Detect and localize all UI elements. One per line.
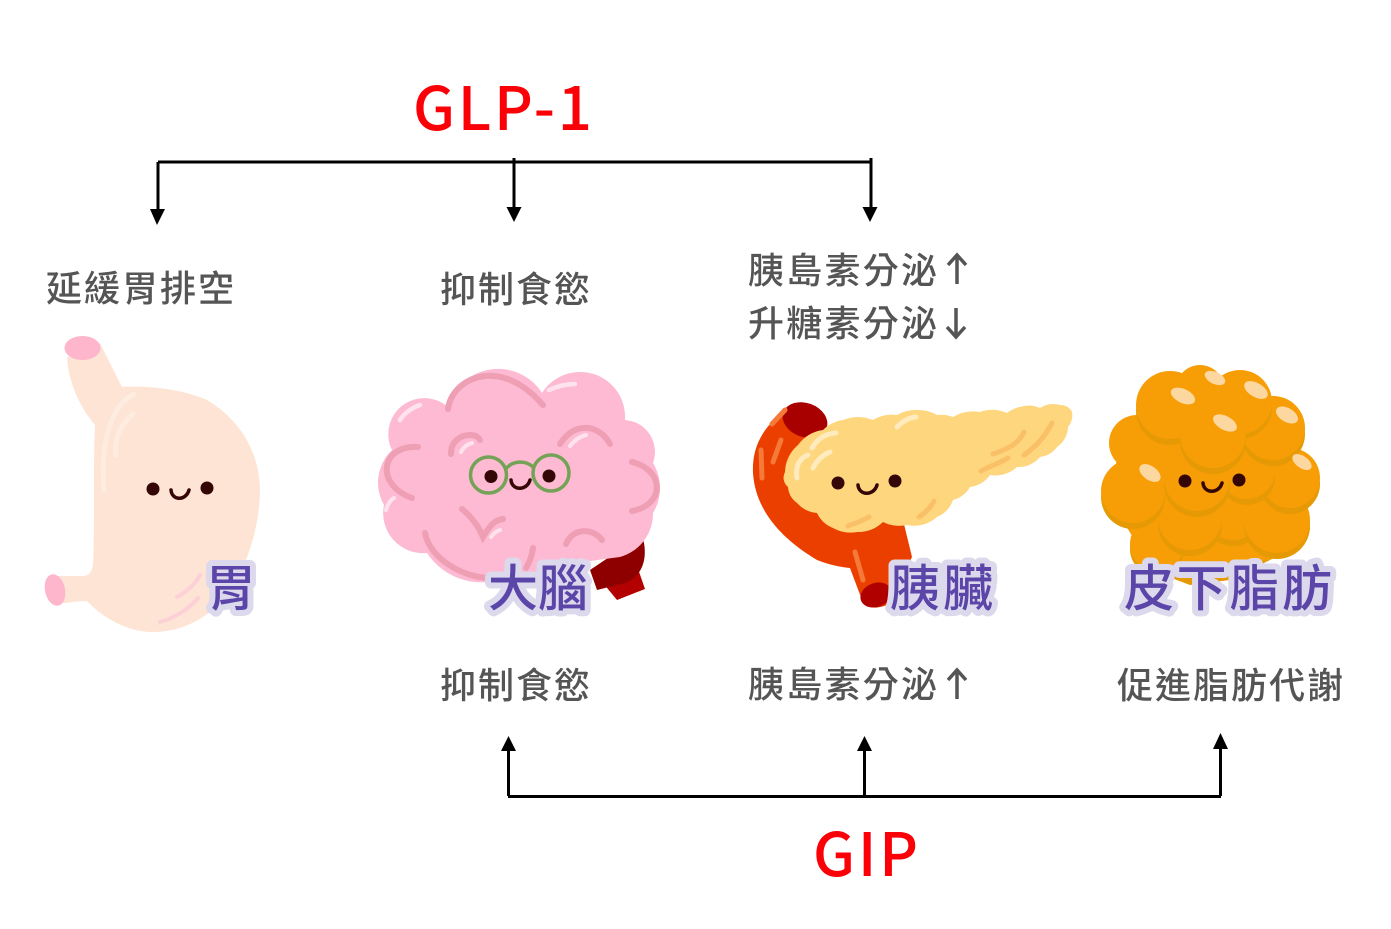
brain illustration bbox=[378, 369, 660, 600]
pancreas illustration bbox=[753, 396, 1072, 612]
stomach illustration bbox=[42, 336, 260, 632]
fat illustration bbox=[1101, 365, 1320, 585]
text: appetite suppression bottom: 抑制食慾 bbox=[440, 665, 590, 706]
text: delayed gastric emptying: 延緩胃排空 bbox=[46, 268, 234, 309]
label: subcutaneous fat: 皮下脂肪 bbox=[1124, 561, 1332, 617]
label: stomach: 胃 bbox=[206, 561, 256, 617]
GLP-1 title: GLP-1 bbox=[413, 61, 592, 148]
GIP title: GIP bbox=[813, 807, 918, 894]
text: insulin and glucagon: 胰島素分泌 bbox=[748, 250, 937, 291]
text: insulin secretion bottom: 胰島素分泌 bbox=[748, 664, 937, 705]
text: appetite suppression top: 抑制食慾 bbox=[440, 269, 590, 310]
GLP-1 bracket arrows bbox=[150, 158, 878, 225]
GIP bracket arrows bbox=[501, 733, 1228, 798]
label: brain: 大腦 bbox=[488, 561, 588, 617]
text: insulin and glucagon bbox=[748, 250, 966, 344]
label: pancreas: 胰臟 bbox=[890, 561, 993, 617]
text: insulin and glucagon: 升糖素分泌 bbox=[748, 303, 937, 344]
text: promotes fat metabolism: 促進脂肪代謝 bbox=[1117, 665, 1343, 706]
